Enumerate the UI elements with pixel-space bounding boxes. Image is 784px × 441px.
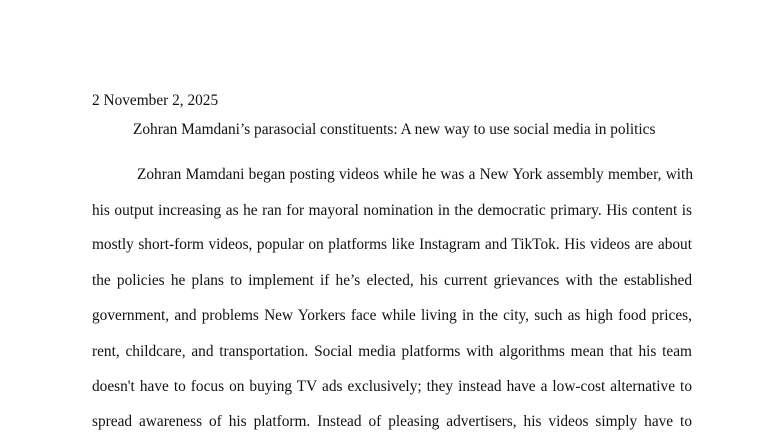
body paragraph: rent, childcare, and transportation. Social media platforms with algorithms mean that his team (92, 343, 692, 360)
body paragraph: government, and problems New Yorkers face while living in the city, such as high food prices, (92, 307, 692, 324)
body paragraph: mostly short-form videos, popular on platforms like Instagram and TikTok. His videos are about (92, 236, 692, 253)
body paragraph: Zohran Mamdani began posting videos while he was a New York assembly member, with (137, 166, 693, 183)
body paragraph: spread awareness of his platform. Instead of pleasing advertisers, his videos simply have to (92, 413, 692, 430)
body paragraph: his output increasing as he ran for mayoral nomination in the democratic primary. His content is (92, 202, 692, 219)
date line: 2 November 2, 2025 (92, 92, 218, 109)
title: Zohran Mamdani’s parasocial constituents: A new way to use social media in politics (133, 121, 655, 138)
body paragraph: the policies he plans to implement if he’s elected, his current grievances with the established (92, 272, 692, 289)
body paragraph: doesn't have to focus on buying TV ads exclusively; they instead have a low-cost alternative to (92, 378, 692, 395)
